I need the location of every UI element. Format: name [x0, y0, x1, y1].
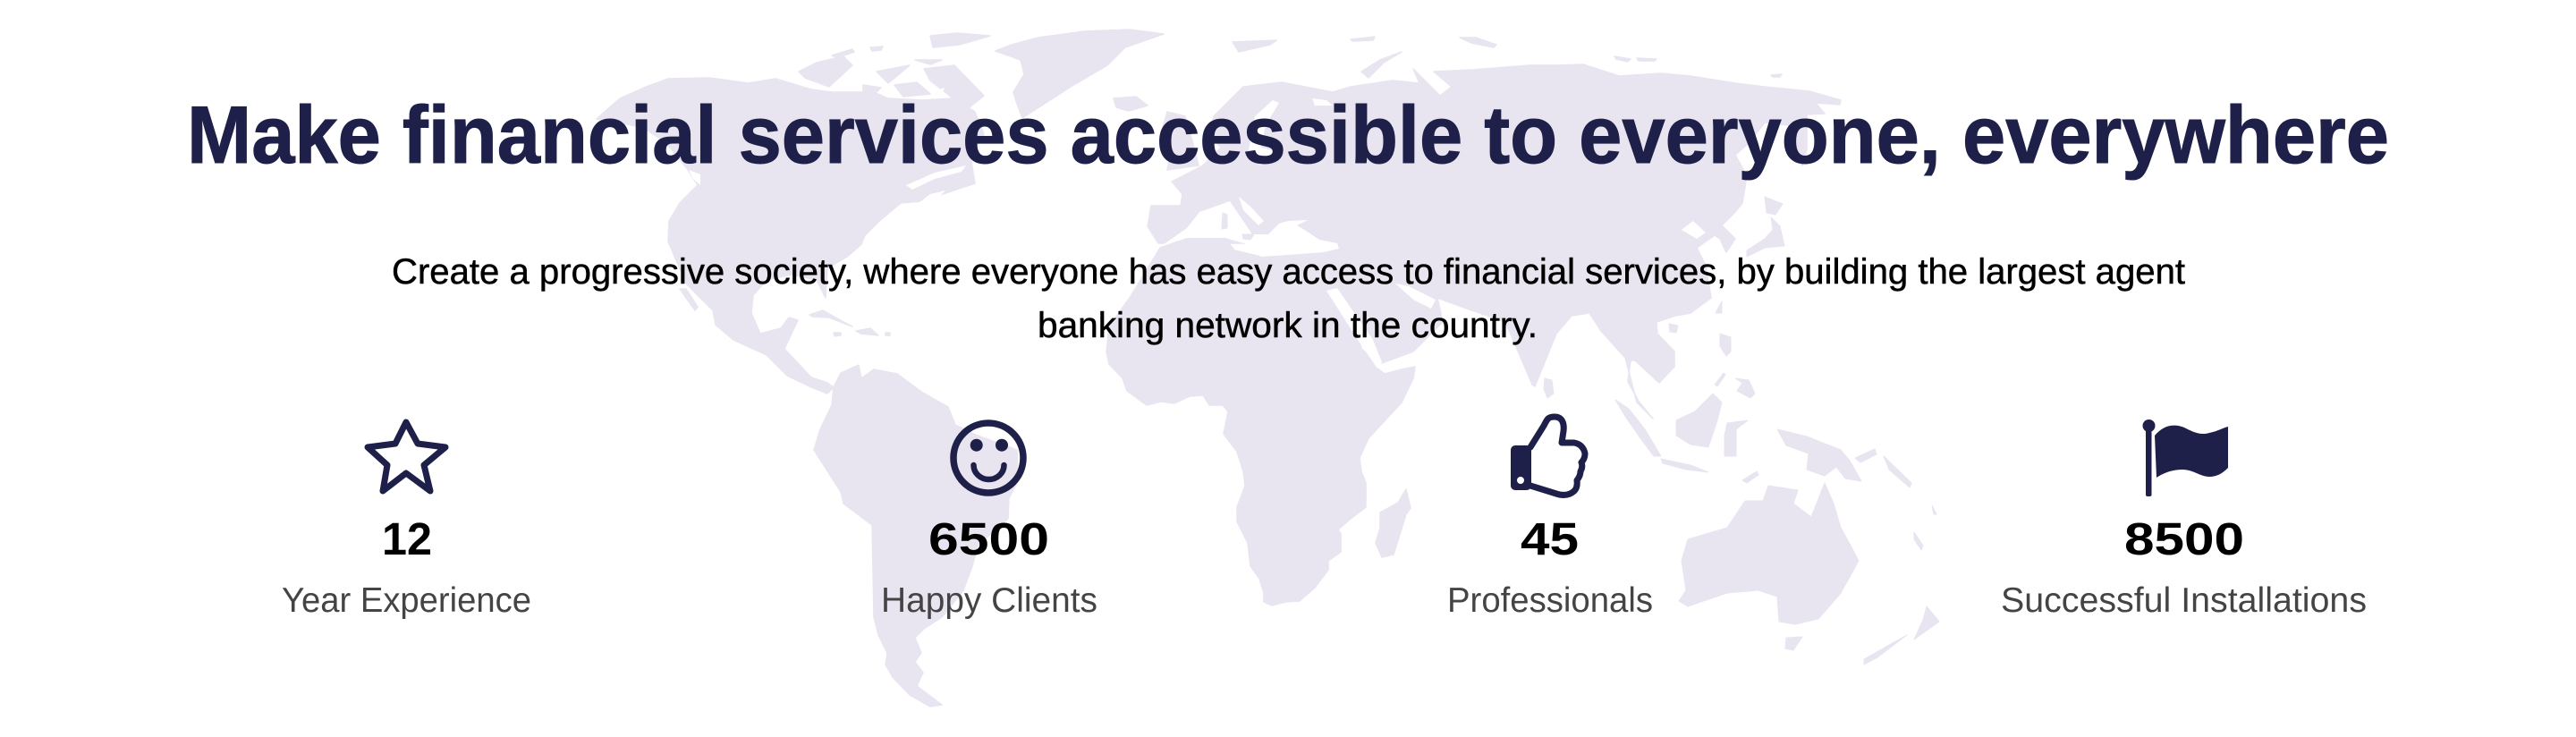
- icon: star: [368, 422, 445, 491]
- label: year experience: Year Experience: [282, 581, 531, 620]
- stat: year experience: [282, 422, 531, 620]
- icon: smiley: [953, 423, 1023, 493]
- intro paragraph: Create a progressive society, where everyone has easy access to financial services, by building the largest agent: [392, 252, 2185, 292]
- icon: thumbs up: [1511, 417, 1585, 495]
- number: 12: 12: [382, 513, 432, 564]
- world map background: [597, 30, 1939, 707]
- map seas: [689, 88, 1706, 368]
- stat: successful installations: [2001, 419, 2367, 620]
- label: professionals: Professionals: [1447, 581, 1653, 620]
- stat: happy clients: [881, 423, 1097, 620]
- icon: flag: [2143, 419, 2228, 496]
- number: 8500: 8500: [2124, 513, 2244, 564]
- number: 6500: 6500: [928, 513, 1049, 564]
- stat: professionals: [1447, 417, 1653, 620]
- label: happy clients: Happy Clients: [881, 581, 1097, 620]
- intro paragraph: [392, 252, 2185, 345]
- title: Make financial services accessible to everyone, everywhere: [187, 90, 2389, 181]
- intro paragraph: banking network in the country.: [1038, 306, 1538, 345]
- label: successful installations: Successful Installations: [2001, 581, 2367, 620]
- number: 45: 45: [1521, 513, 1579, 564]
